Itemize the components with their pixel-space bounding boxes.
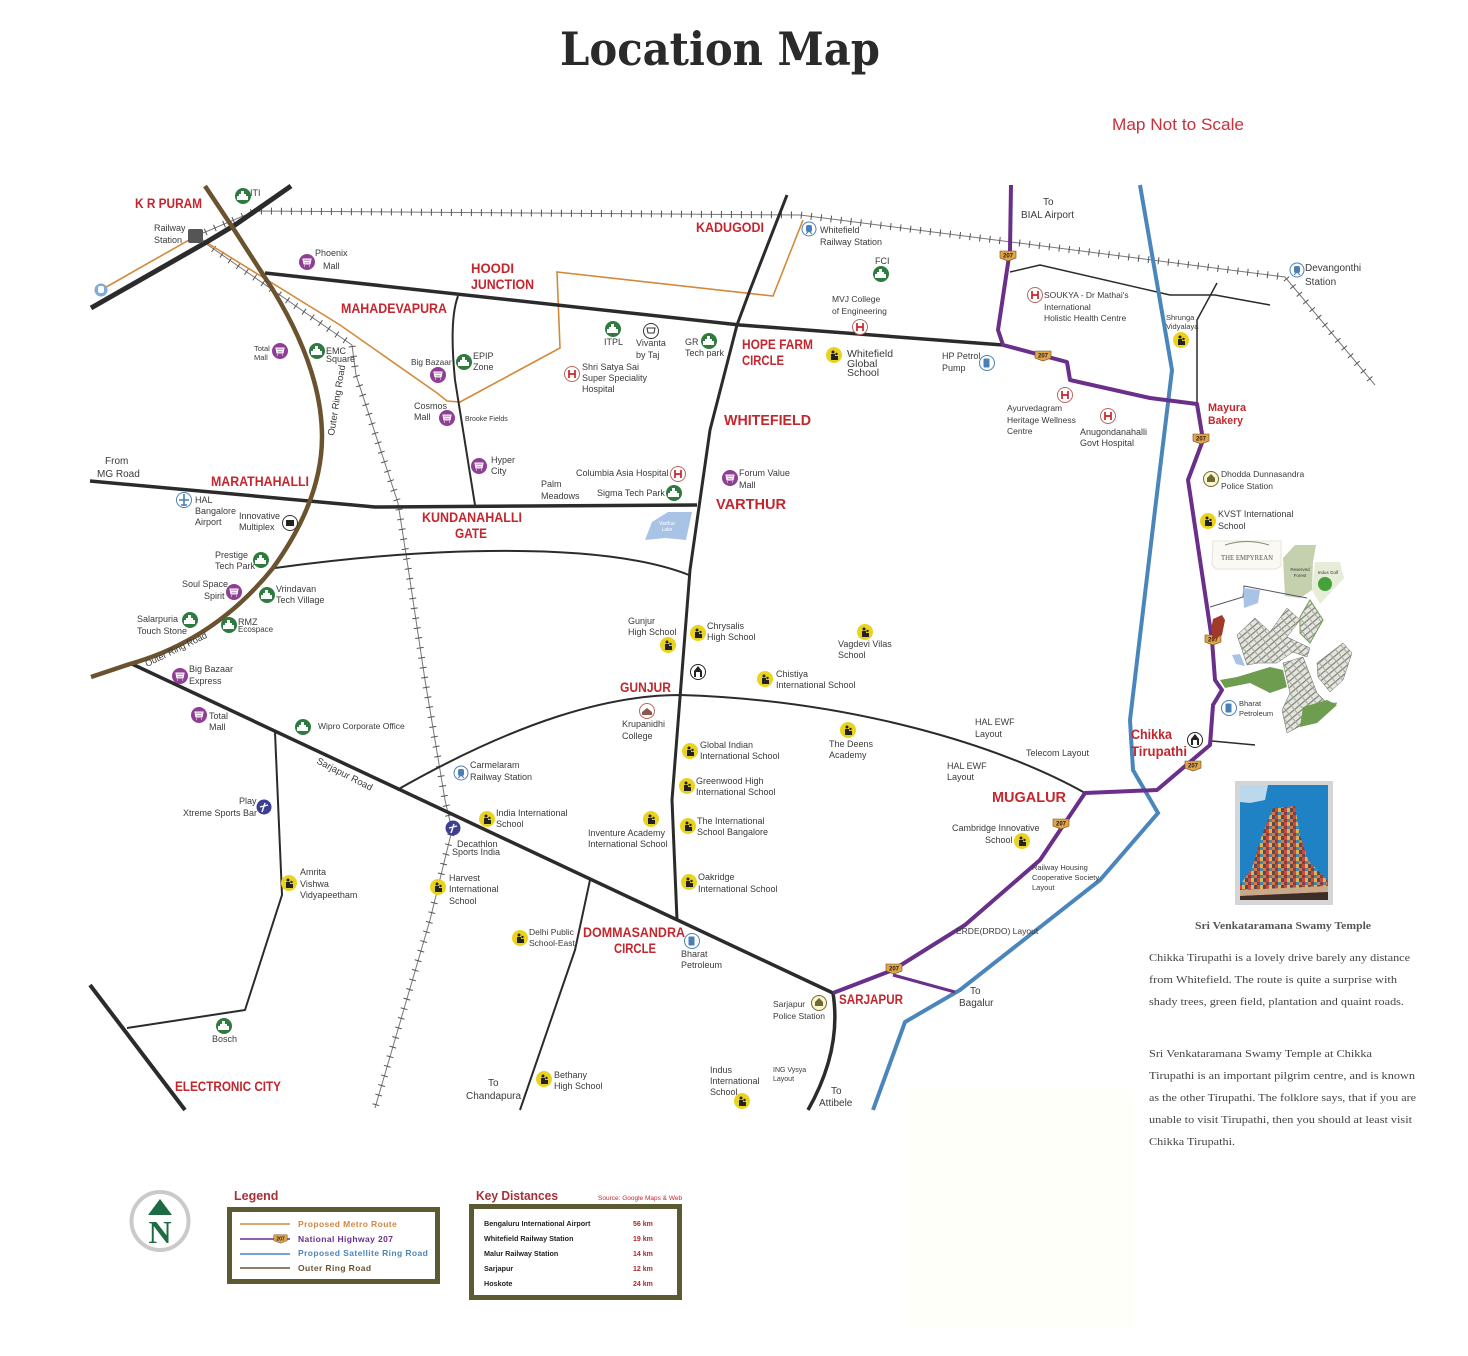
schools: Gunjur bbox=[628, 616, 655, 626]
legend: National Highway 207 bbox=[298, 1234, 393, 1244]
malls: Mall bbox=[323, 261, 340, 271]
layout labels: Layout bbox=[947, 772, 975, 782]
schools: School bbox=[838, 650, 866, 660]
area labels bbox=[135, 196, 1247, 1094]
key distances: Whitefield Railway Station bbox=[484, 1234, 573, 1243]
stations: rail: Station bbox=[1305, 277, 1336, 288]
directions: BIAL Airport bbox=[1021, 210, 1074, 221]
schools: International School bbox=[700, 751, 780, 761]
layout labels: Telecom Layout bbox=[1026, 748, 1090, 758]
layout labels: HAL EWF bbox=[947, 761, 987, 771]
schools: High School bbox=[707, 632, 756, 642]
area labels: KADUGODI bbox=[696, 220, 764, 235]
tech parks: Square bbox=[326, 354, 355, 364]
malls: Express bbox=[189, 676, 222, 686]
metro route bbox=[101, 220, 803, 402]
area labels: HOPE FARM bbox=[742, 337, 813, 352]
railway lines bbox=[196, 211, 1375, 1108]
malls: Spirit bbox=[204, 591, 225, 601]
directions: To bbox=[831, 1086, 842, 1097]
road network bbox=[90, 186, 1270, 1110]
schools: Amrita bbox=[300, 867, 326, 877]
temple photo bbox=[1235, 781, 1333, 905]
schools: Delhi Public bbox=[529, 927, 575, 937]
key distances: 24 km bbox=[633, 1281, 653, 1288]
schools: Global Indian bbox=[700, 740, 753, 750]
area labels: Tirupathi bbox=[1131, 743, 1187, 759]
hospitals and institutions: SOUKYA - Dr Mathai's bbox=[1044, 290, 1129, 300]
hospitals and institutions: Police Station bbox=[1221, 481, 1273, 491]
hospitals and institutions: Brooke Fields bbox=[465, 416, 508, 423]
north arrow bbox=[132, 1192, 188, 1250]
description paragraphs bbox=[1149, 952, 1416, 1148]
schools: School bbox=[985, 835, 1013, 845]
schools: The Deens bbox=[829, 739, 874, 749]
schools: Academy bbox=[829, 750, 867, 760]
description paragraphs: unable to visit Tirupathi, then you should at least visit bbox=[1149, 1114, 1412, 1126]
tech parks: EMC bbox=[326, 346, 346, 356]
area labels: HOODI bbox=[471, 261, 514, 276]
hospitals and institutions: College bbox=[622, 731, 653, 741]
north arrow: N bbox=[148, 1214, 172, 1250]
Varthur lake: Lake bbox=[662, 527, 673, 533]
hospitals and institutions: Anugondanahalli bbox=[1080, 427, 1147, 437]
road labels: Outer Ring Road bbox=[143, 630, 209, 669]
area labels: DOMMASANDRA bbox=[583, 925, 685, 940]
petrol pumps: HP Petrol bbox=[942, 351, 980, 361]
schools: Vishwa bbox=[300, 879, 329, 889]
key distances: Bengaluru International Airport bbox=[484, 1219, 591, 1228]
stations: rail bbox=[94, 222, 1361, 782]
schools: Vidyalaya bbox=[1166, 322, 1199, 331]
hospitals and institutions: Govt Hospital bbox=[1080, 438, 1134, 448]
hospitals and institutions: Hospital bbox=[582, 384, 615, 394]
hospitals and institutions: Xtreme Sports Bar bbox=[183, 808, 257, 818]
stations: rail: Carmelaram bbox=[470, 760, 520, 770]
description paragraphs: Tirupathi is an important pilgrim centre, and is known bbox=[1149, 1070, 1416, 1082]
area labels: CIRCLE bbox=[614, 941, 656, 956]
Varthur lake bbox=[645, 512, 692, 540]
description paragraphs: as the other Tirupathi. The folklore says, that if you are bbox=[1149, 1092, 1416, 1104]
schools: School Bangalore bbox=[697, 827, 768, 837]
hospitals and institutions: Centre bbox=[1007, 426, 1033, 436]
area labels: K R PURAM bbox=[135, 196, 202, 211]
petrol pumps: Bharat bbox=[681, 949, 708, 959]
Varthur lake: Varthur bbox=[659, 521, 675, 527]
area labels: VARTHUR bbox=[716, 496, 786, 513]
malls: Soul Space bbox=[182, 579, 228, 589]
schools: KVST International bbox=[1218, 509, 1293, 519]
tech parks: Prestige bbox=[215, 550, 248, 560]
area labels: Chikka bbox=[1131, 726, 1172, 742]
malls: Big Bazaar bbox=[189, 664, 233, 674]
key distances: 19 km bbox=[633, 1236, 653, 1243]
tech parks: FCI bbox=[875, 256, 890, 266]
area labels: GATE bbox=[455, 526, 487, 541]
hospitals and institutions: Sports India bbox=[452, 847, 500, 857]
schools: Vidyapeetham bbox=[300, 890, 357, 900]
petrol pumps: Pump bbox=[942, 363, 966, 373]
layout labels bbox=[773, 717, 1099, 1083]
schools: Harvest bbox=[449, 873, 481, 883]
layout labels: Layout bbox=[1032, 883, 1055, 892]
layout labels: Railway Housing bbox=[1032, 863, 1088, 872]
layout labels: ERDE(DRDO) Layout bbox=[956, 926, 1039, 936]
schools: Cambridge Innovative bbox=[952, 823, 1040, 833]
schools: Indus bbox=[710, 1065, 733, 1075]
directions: Bagalur bbox=[959, 998, 994, 1009]
stations: rail: Whitefield bbox=[820, 225, 860, 235]
tech parks: Zone bbox=[473, 362, 494, 372]
directions: Chandapura bbox=[466, 1091, 521, 1102]
schools: School bbox=[1218, 521, 1246, 531]
malls: Mall bbox=[414, 412, 431, 422]
stations: rail: Railway bbox=[154, 223, 186, 233]
key distances bbox=[472, 1189, 682, 1298]
malls: Mall bbox=[739, 480, 756, 490]
title: Location Map bbox=[560, 22, 880, 76]
schools: Greenwood High bbox=[696, 776, 764, 786]
area labels: MUGALUR bbox=[992, 789, 1066, 806]
legend: Proposed Satellite Ring Road bbox=[298, 1248, 428, 1258]
schools: Bethany bbox=[554, 1070, 588, 1080]
petrol pumps bbox=[681, 351, 1273, 970]
hospitals and institutions: by Taj bbox=[636, 350, 659, 360]
directions: Attibele bbox=[819, 1098, 853, 1109]
area labels: JUNCTION bbox=[471, 277, 534, 292]
area labels: SARJAPUR bbox=[839, 992, 903, 1007]
schools: Shrunga bbox=[1166, 313, 1195, 322]
schools: Chistiya bbox=[776, 669, 808, 679]
layout labels: Cooperative Society bbox=[1032, 873, 1099, 882]
schools: School bbox=[449, 896, 477, 906]
hospitals and institutions: of Engineering bbox=[832, 306, 887, 316]
area labels: KUNDANAHALLI bbox=[422, 510, 522, 525]
tech parks: Tech Village bbox=[276, 595, 324, 605]
stations: rail: Station bbox=[154, 235, 182, 245]
petrol pumps: Petroleum bbox=[681, 960, 722, 970]
malls: Total bbox=[254, 344, 270, 353]
tech parks: Vrindavan bbox=[276, 584, 316, 594]
project master plan: Reserved bbox=[1290, 567, 1310, 572]
description paragraphs: from Whitefield. The route is quite a surprise with bbox=[1149, 974, 1398, 986]
hospitals and institutions: Police Station bbox=[773, 1011, 825, 1021]
project master plan: Indus Golf bbox=[1318, 570, 1339, 575]
project master plan: Forest bbox=[1294, 573, 1307, 578]
tech parks: Touch Stone bbox=[137, 626, 187, 636]
hospitals and institutions: MVJ College bbox=[832, 294, 880, 304]
stations: rail: Railway Station bbox=[470, 772, 532, 782]
layout labels: Layout bbox=[975, 729, 1003, 739]
hospitals and institutions: Columbia Asia Hospital bbox=[576, 468, 669, 478]
hospitals and institutions: Vivanta bbox=[636, 338, 666, 348]
temple heading: Sri Venkataramana Swamy Temple bbox=[1195, 920, 1371, 932]
key distances: 56 km bbox=[633, 1221, 653, 1228]
key distances: Malur Railway Station bbox=[484, 1249, 558, 1258]
hospitals and institutions bbox=[183, 288, 1304, 1021]
area labels: Bakery bbox=[1208, 415, 1244, 427]
road labels: Sarjapur Road bbox=[315, 756, 374, 793]
directions: To bbox=[1043, 197, 1054, 208]
project master plan: THE EMPYREAN bbox=[1221, 553, 1274, 562]
key distances: 12 km bbox=[633, 1266, 653, 1273]
tech parks: Tech park bbox=[685, 348, 725, 358]
key distances: Key Distances bbox=[476, 1189, 558, 1203]
schools: High School bbox=[628, 627, 677, 637]
malls: Forum Value bbox=[739, 468, 790, 478]
satellite ring road bbox=[873, 185, 1172, 1110]
tech parks: ITPL bbox=[604, 337, 623, 347]
outer ring road bbox=[91, 186, 322, 677]
tech parks: Tech Park bbox=[215, 561, 256, 571]
tech parks: Ecospace bbox=[238, 625, 274, 634]
hospitals and institutions: International bbox=[1044, 302, 1091, 312]
schools: School bbox=[847, 367, 879, 379]
petrol pumps: Petroleum bbox=[1239, 709, 1273, 718]
highway shields bbox=[886, 251, 1221, 974]
project master plan bbox=[1210, 541, 1352, 733]
malls: Big Bazaar bbox=[411, 357, 452, 367]
tech parks: Wipro Corporate Office bbox=[318, 721, 405, 731]
layout labels: ING Vysya bbox=[773, 1067, 806, 1074]
schools: International School bbox=[698, 884, 778, 894]
description paragraphs: Chikka Tirupathi. bbox=[1149, 1136, 1235, 1148]
schools: Chrysalis bbox=[707, 621, 745, 631]
hospitals and institutions: Ayurvedagram bbox=[1007, 403, 1062, 413]
malls: Total bbox=[209, 711, 228, 721]
hospitals and institutions: Innovative bbox=[239, 511, 280, 521]
tech parks: ITI bbox=[250, 188, 260, 198]
area labels: GUNJUR bbox=[620, 680, 671, 695]
schools bbox=[281, 313, 1293, 1109]
note: map not to scale: Map Not to Scale bbox=[1112, 115, 1244, 134]
directions: MG Road bbox=[97, 469, 140, 480]
tech parks: Salarpuria bbox=[137, 614, 178, 624]
schools: The International bbox=[697, 816, 765, 826]
schools: Inventure Academy bbox=[588, 828, 666, 838]
directions bbox=[97, 197, 1074, 1109]
layout labels: Layout bbox=[773, 1076, 794, 1083]
legend: Proposed Metro Route bbox=[298, 1219, 397, 1229]
area labels: WHITEFIELD bbox=[724, 412, 811, 429]
tech parks bbox=[137, 188, 890, 1044]
hospitals and institutions: Play bbox=[239, 796, 257, 806]
key distances: Hoskote bbox=[484, 1279, 512, 1288]
hospitals and institutions: Dhodda Dunnasandra bbox=[1221, 469, 1304, 479]
legend bbox=[230, 1189, 438, 1282]
key distances: 14 km bbox=[633, 1251, 653, 1258]
schools: International School bbox=[588, 839, 668, 849]
layout labels: HAL EWF bbox=[975, 717, 1015, 727]
malls: City bbox=[491, 466, 507, 476]
schools: Oakridge bbox=[698, 872, 735, 882]
description paragraphs: shady trees, green field, plantation and quaint roads. bbox=[1149, 996, 1404, 1008]
stations: rail: Airport bbox=[195, 517, 222, 527]
malls: Hyper bbox=[491, 455, 515, 465]
hospitals and institutions: Super Speciality bbox=[582, 373, 648, 383]
malls bbox=[172, 248, 790, 732]
description paragraphs: Chikka Tirupathi is a lovely drive barely any distance bbox=[1149, 952, 1410, 964]
petrol pumps: Bharat bbox=[1239, 699, 1262, 708]
stations: rail: Devangonthi bbox=[1305, 263, 1361, 274]
legend: Legend bbox=[234, 1189, 278, 1203]
schools: Global bbox=[847, 358, 877, 370]
directions: From bbox=[105, 456, 128, 467]
schools: School bbox=[496, 819, 524, 829]
hospitals and institutions: Palm bbox=[541, 479, 562, 489]
road labels: Outer Ring Road bbox=[326, 364, 348, 436]
schools: Vagdevi Vilas bbox=[838, 639, 892, 649]
hospitals and institutions: Multiplex bbox=[239, 522, 275, 532]
hospitals and institutions: Holistic Health Centre bbox=[1044, 313, 1126, 323]
hospitals and institutions: Heritage Wellness bbox=[1007, 415, 1076, 425]
schools: International bbox=[449, 884, 499, 894]
schools: India International bbox=[496, 808, 568, 818]
tech parks: RMZ bbox=[238, 617, 258, 627]
malls: Mall bbox=[209, 722, 226, 732]
stations: rail: HAL bbox=[195, 495, 213, 505]
malls: Phoenix bbox=[315, 248, 348, 258]
malls: Cosmos bbox=[414, 401, 448, 411]
schools: International School bbox=[696, 787, 776, 797]
area labels: ELECTRONIC CITY bbox=[175, 1079, 281, 1094]
key distances: Source: Google Maps & Web bbox=[598, 1195, 682, 1202]
malls: Mall bbox=[254, 353, 268, 362]
tech parks: EPIP bbox=[473, 351, 494, 361]
schools: Whitefield bbox=[847, 348, 893, 360]
hospitals and institutions: Sarjapur bbox=[773, 999, 805, 1009]
hospitals and institutions: Decathlon bbox=[457, 839, 498, 849]
schools: International School bbox=[776, 680, 856, 690]
schools: High School bbox=[554, 1081, 603, 1091]
area labels: CIRCLE bbox=[742, 353, 784, 368]
description paragraphs: Sri Venkataramana Swamy Temple at Chikka bbox=[1149, 1048, 1372, 1060]
road labels bbox=[143, 364, 374, 793]
hospitals and institutions: Meadows bbox=[541, 491, 580, 501]
directions: To bbox=[488, 1078, 499, 1089]
legend: Outer Ring Road bbox=[298, 1263, 372, 1273]
schools: School bbox=[710, 1087, 738, 1097]
faint patch background bbox=[908, 1090, 1133, 1330]
directions: To bbox=[970, 986, 981, 997]
hospitals and institutions: Shri Satya Sai bbox=[582, 362, 639, 372]
tech parks: Bosch bbox=[212, 1034, 237, 1044]
stations: rail: Bangalore bbox=[195, 506, 236, 516]
stations: rail: Railway Station bbox=[820, 237, 882, 247]
key distances: Sarjapur bbox=[484, 1264, 513, 1273]
tech parks: GR bbox=[685, 337, 699, 347]
national highway 207 bbox=[833, 185, 1222, 993]
area labels: MARATHAHALLI bbox=[211, 474, 309, 489]
schools: School-East bbox=[529, 938, 575, 948]
area labels: Mayura bbox=[1208, 402, 1247, 414]
area labels: MAHADEVAPURA bbox=[341, 301, 447, 316]
tech parks: Sigma Tech Park bbox=[597, 488, 665, 498]
schools: International bbox=[710, 1076, 760, 1086]
hospitals and institutions: Krupanidhi bbox=[622, 719, 665, 729]
